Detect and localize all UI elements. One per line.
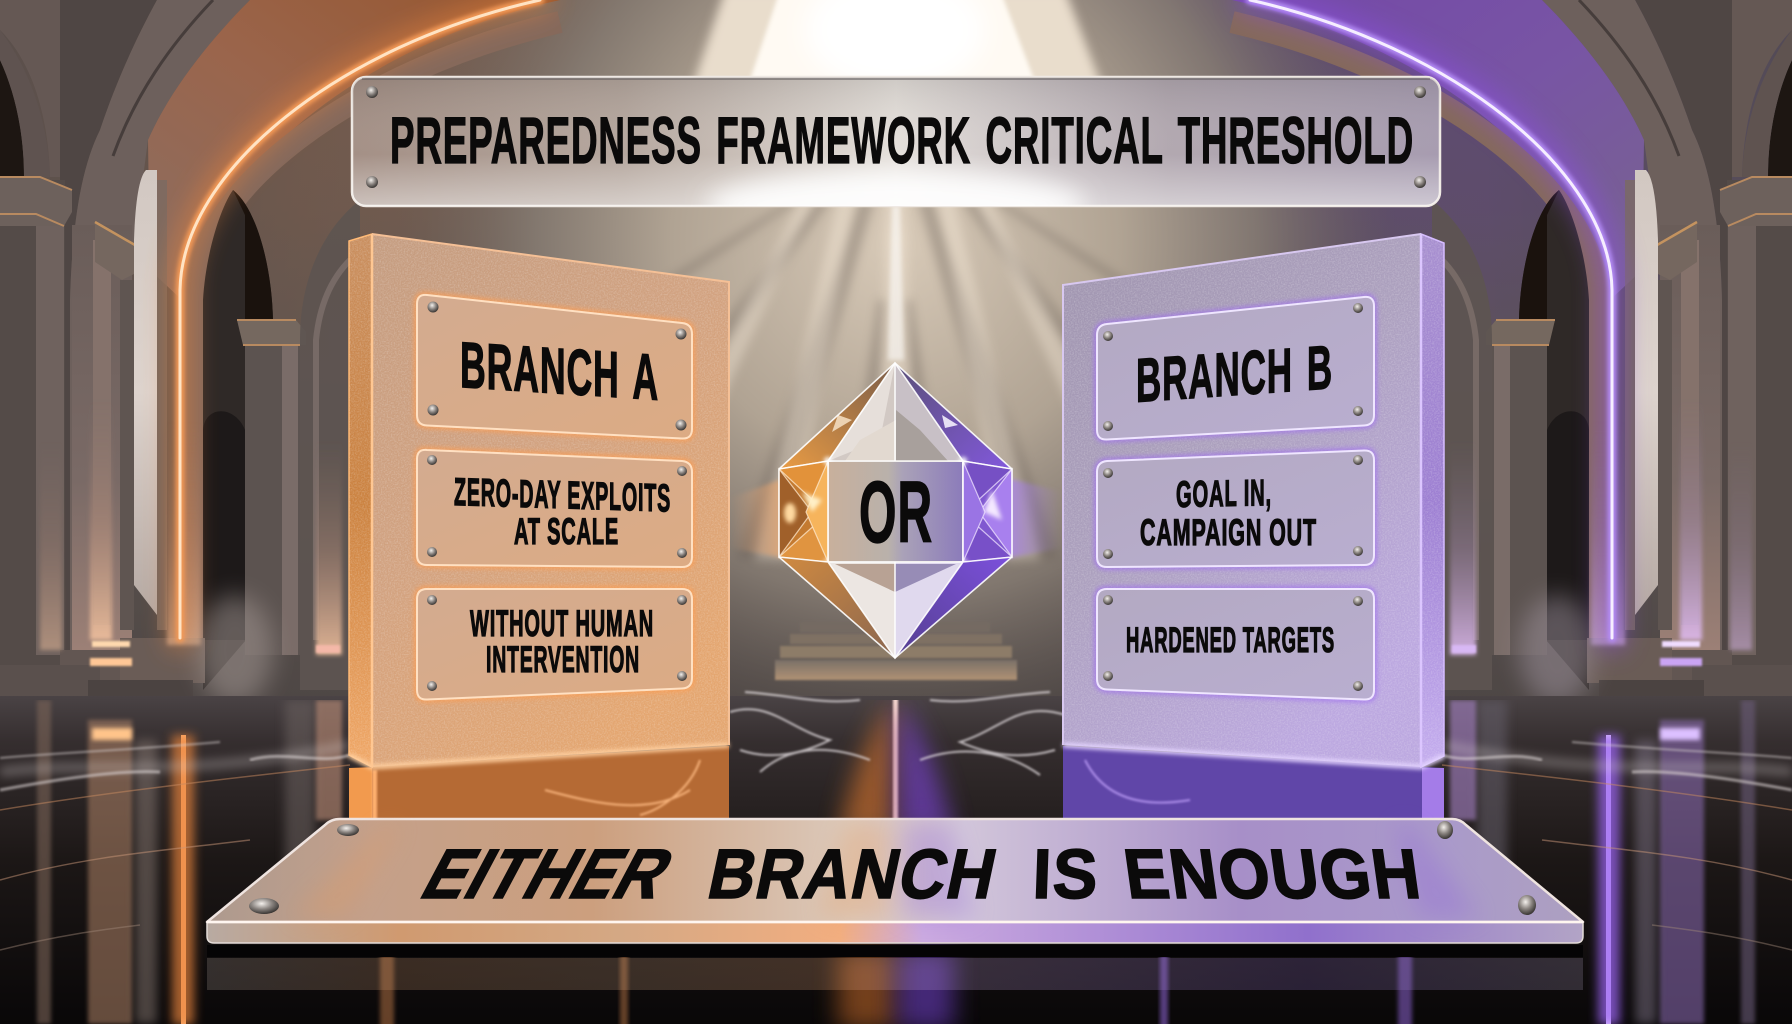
plate: without human intervention: INTERVENTION xyxy=(486,639,640,680)
plate: zero-day exploits at scale: AT SCALE xyxy=(514,511,619,552)
gem centre band xyxy=(829,462,962,561)
plate: goal in, campaign out: GOAL IN, xyxy=(1176,472,1272,515)
title plaque xyxy=(350,76,1442,208)
conclusion plaque xyxy=(207,819,1583,943)
plate: goal in, campaign out: CAMPAIGN OUT xyxy=(1140,512,1317,553)
plate: hardened targets xyxy=(1097,589,1374,700)
conclusion text: ENOUGH xyxy=(1119,834,1426,913)
conclusion text: IS xyxy=(1031,835,1100,913)
plate: zero-day exploits at scale xyxy=(417,450,692,567)
plate: goal in, campaign out xyxy=(1097,450,1374,567)
gem highlights xyxy=(784,457,1002,566)
far staircase xyxy=(775,622,1017,680)
neon arch: purple xyxy=(1250,0,1612,638)
top light cone xyxy=(690,0,1105,95)
background: right arcade xyxy=(1232,0,1792,705)
neon arch: orange xyxy=(180,0,540,638)
plate: zero-day exploits at scale: ZERO-DAY EXPLOITS xyxy=(454,471,671,521)
plaque rivets xyxy=(249,821,1536,915)
light rays from ceiling xyxy=(540,0,1250,600)
conclusion text: BRANCH xyxy=(702,835,1004,913)
floor reflection: branch B panel xyxy=(1063,746,1444,820)
panel: branch B xyxy=(1063,234,1444,767)
gem side facets xyxy=(779,461,828,562)
gem lower facets xyxy=(779,557,1012,658)
floor reflection: bottom plaque xyxy=(207,945,1583,990)
dark gaps between rays xyxy=(540,200,1250,600)
title rivets xyxy=(366,86,1426,188)
panel: branch A xyxy=(349,234,729,767)
conclusion text: EITHER xyxy=(409,834,689,913)
floor light veins xyxy=(0,692,1792,950)
plate: Branch B heading xyxy=(1097,297,1374,440)
bright rays xyxy=(660,190,1130,560)
light streaks beside gem xyxy=(730,478,1062,558)
plate: hardened targets: HARDENED TARGETS xyxy=(1126,621,1335,660)
gem label: OR xyxy=(859,464,933,561)
gem upper facets xyxy=(779,363,1012,469)
plate: Branch A heading xyxy=(417,295,692,439)
background: left arcade xyxy=(0,0,560,705)
floor xyxy=(0,690,1792,1024)
plate: Branch A heading: BRANCH A xyxy=(460,328,659,414)
plate: Branch B heading: BRANCH B xyxy=(1136,333,1333,416)
gem edges xyxy=(779,363,1012,658)
background: hall back wall xyxy=(0,0,1792,700)
floor reflection: branch A panel xyxy=(349,746,729,820)
plate: without human intervention xyxy=(417,589,692,700)
conclusion text xyxy=(409,834,1426,913)
icon: OR crystal gem xyxy=(779,363,1012,658)
plate: without human intervention: WITHOUT HUMAN xyxy=(470,603,654,644)
